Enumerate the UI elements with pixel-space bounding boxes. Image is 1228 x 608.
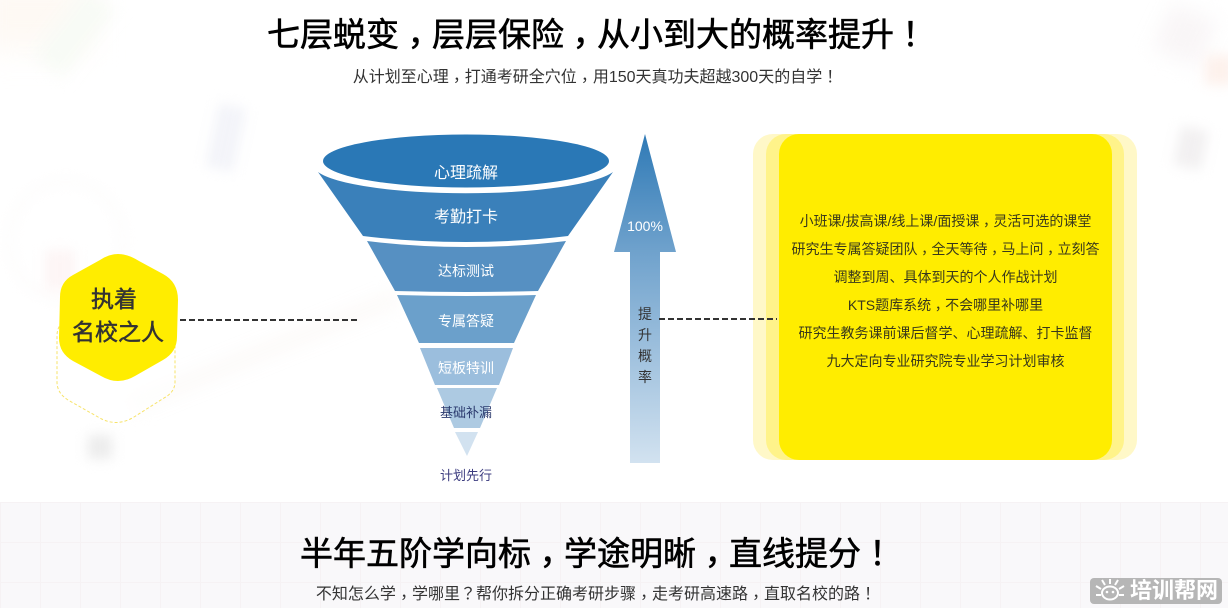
dashed connector left	[180, 319, 357, 321]
hexagon label	[72, 286, 164, 345]
probability arrow	[614, 134, 676, 463]
dashed hexagon outline	[57, 296, 175, 422]
arrow percentage: 100%	[627, 218, 663, 234]
feature list: 调整到周、具体到天的个人作战计划	[834, 269, 1058, 285]
arrow label: 率	[638, 369, 652, 385]
icon: sun face	[1096, 579, 1124, 600]
solid hexagon	[59, 254, 178, 381]
funnel layer 1	[455, 432, 478, 456]
hexagon label: 执着	[91, 286, 137, 312]
feature list: 九大定向专业研究院专业学习计划审核	[826, 353, 1064, 369]
arrow label	[638, 306, 652, 385]
label: basics: 基础补漏	[440, 405, 492, 420]
hexagon label: 名校之人	[72, 319, 164, 345]
funnel layer 5	[367, 241, 566, 292]
section subtitle: 不知怎么学，学哪里？帮你拆分正确考研步骤，走考研高速路，直取名校的路！	[316, 580, 876, 608]
feature list: 研究生专属答疑团队，全天等待，马上问，立刻答	[792, 241, 1100, 263]
funnel layer 4	[397, 295, 536, 343]
title: 七层蜕变，层层保险，从小到大的概率提升！	[267, 8, 927, 65]
card: features	[753, 134, 1137, 460]
funnel chart	[318, 134, 676, 463]
subtitle: 从计划至心理，打通考研全穴位，用150天真功夫超越300天的自学！	[353, 63, 838, 91]
arrow label: 升	[638, 327, 652, 343]
label: training: 短板特训	[438, 360, 494, 376]
hexagon badge	[56, 254, 178, 423]
bottom section background	[0, 502, 1228, 608]
label: qa: 专属答疑	[438, 313, 494, 329]
arrow label: 提	[638, 306, 652, 322]
watermark text: 培训帮网	[1130, 578, 1218, 603]
funnel layer 3	[420, 348, 513, 385]
feature list: 研究生教务课前课后督学、心理疏解、打卡监督	[798, 325, 1092, 341]
card middle layer	[766, 134, 1124, 460]
label: attendance: 考勤打卡	[434, 209, 498, 226]
feature list	[792, 213, 1100, 369]
funnel layer 6	[318, 172, 613, 242]
funnel labels: 心理疏解	[434, 165, 498, 182]
feature list: KTS题库系统，不会哪里补哪里	[848, 297, 1043, 319]
arrow label: 概	[638, 348, 652, 364]
dashed connector right	[659, 318, 777, 320]
card inner layer	[779, 134, 1112, 460]
funnel layer 7	[323, 134, 609, 188]
watermark	[1090, 578, 1222, 604]
feature list: 小班课/拔高课/线上课/面授课，灵活可选的课堂	[800, 213, 1091, 235]
section title: 半年五阶学向标，学途明晰，直线提分！	[300, 527, 894, 584]
card outer layer	[753, 134, 1137, 460]
label: test: 达标测试	[438, 263, 494, 279]
label: plan: 计划先行	[440, 468, 492, 483]
funnel layer 2	[437, 388, 497, 428]
